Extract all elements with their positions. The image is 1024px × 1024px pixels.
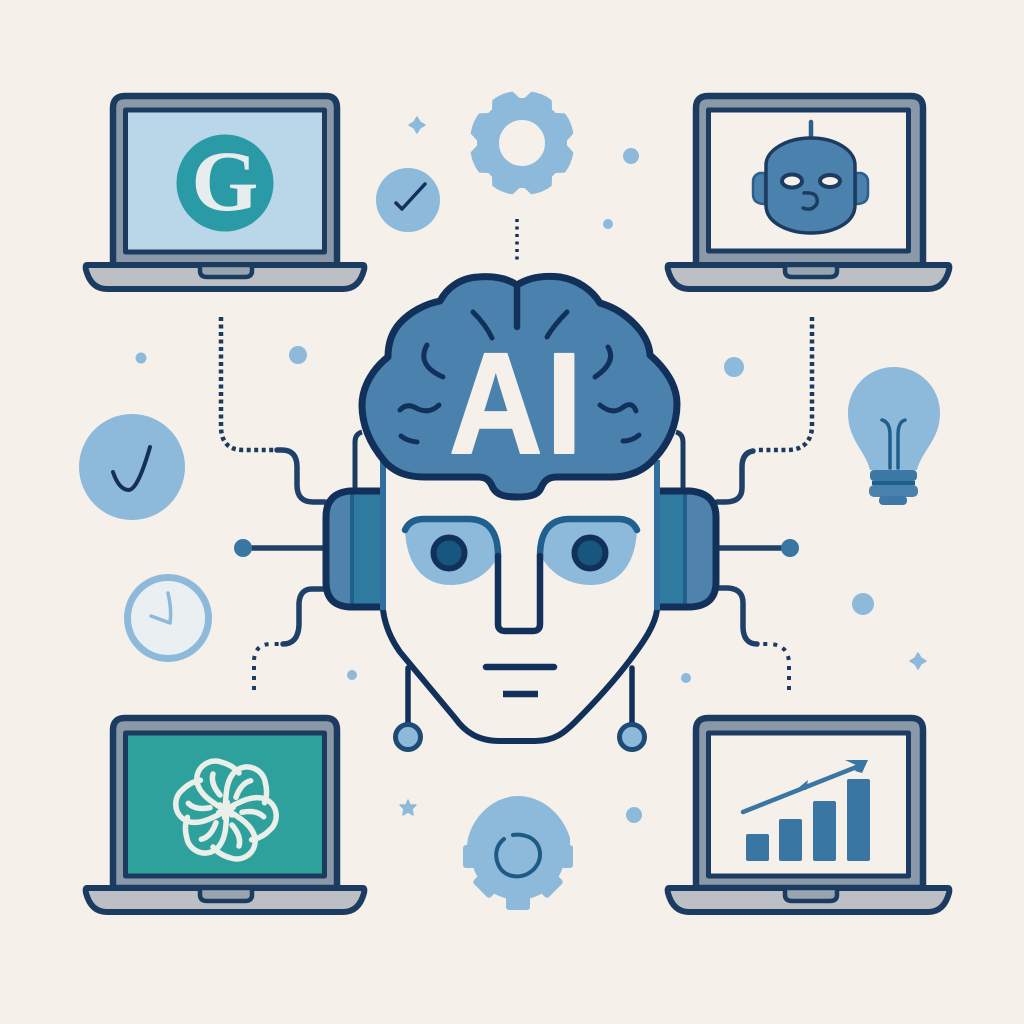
icon: swirl logo: [169, 760, 283, 860]
right ear cup: [658, 491, 716, 607]
laptop: bottom left with swirl logo: [86, 718, 364, 912]
dotted connector above brain: [515, 219, 519, 264]
icon: small check badge: [376, 168, 440, 232]
brows and nose: [405, 519, 637, 631]
icon: bottom gear: [463, 796, 573, 910]
decorative dots and sparkles: [136, 117, 926, 823]
bar chart: [743, 760, 870, 861]
face: [383, 460, 657, 741]
left ear cup: [326, 491, 382, 607]
brain folds: [400, 285, 639, 442]
laptop: top right with robot face: [668, 96, 949, 289]
AI label: AI: [449, 324, 582, 485]
icon: top gear: [467, 88, 577, 198]
bottom connector nodes: [396, 724, 644, 750]
brain with AI label: [362, 276, 677, 497]
icon: G logo: G: [192, 133, 258, 229]
circuit connectors: [221, 317, 812, 726]
left eye: [405, 522, 497, 585]
icon: clock: [128, 578, 208, 658]
icon: robot head: [753, 122, 868, 233]
icon: light bulb: [848, 367, 940, 505]
icon: large check badge: [79, 414, 185, 520]
mouth: [486, 667, 554, 694]
laptop: top left with G logo: [86, 96, 364, 289]
laptop: bottom right with bar chart: [668, 718, 949, 912]
headband sides: [355, 432, 683, 492]
right eye: [542, 522, 637, 585]
left and right connector nodes: [234, 539, 799, 557]
icon: G logo: [176, 133, 274, 232]
